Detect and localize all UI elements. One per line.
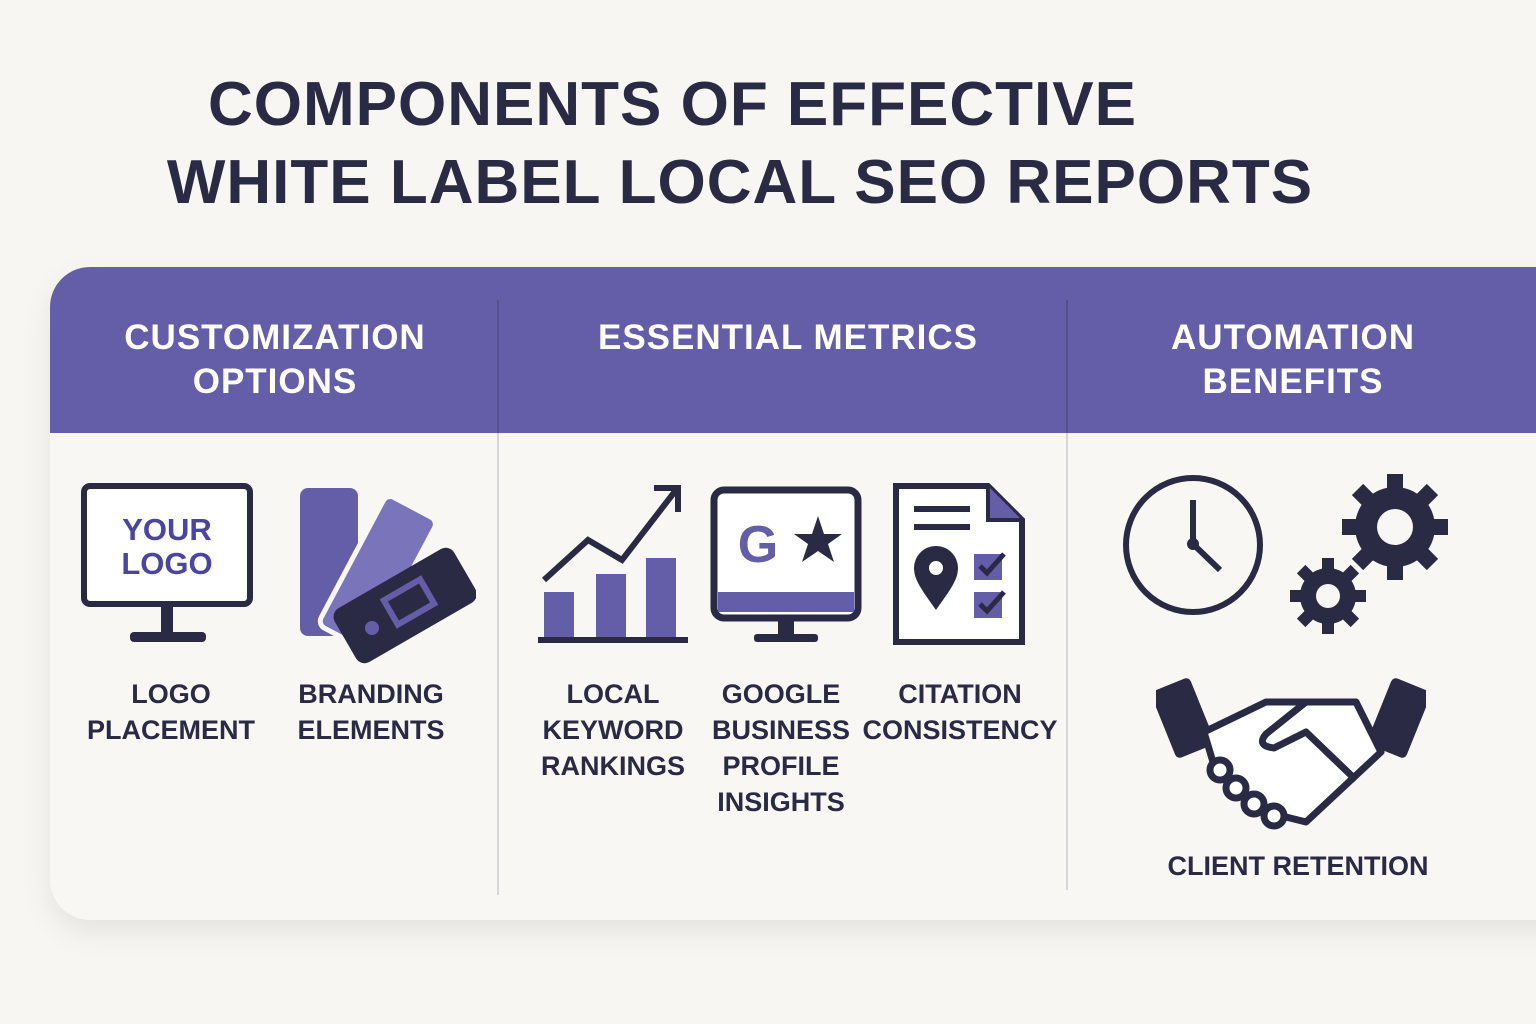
title [167, 70, 1313, 217]
label: client retention: CLIENT RETENTION [1168, 851, 1428, 881]
card [50, 267, 1536, 920]
title: COMPONENTS OF EFFECTIVE [208, 70, 1137, 139]
icon: logo monitor: LOGO [121, 546, 213, 581]
label: google business profile insights: PROFILE [722, 751, 840, 781]
heading: automation benefits [1171, 318, 1415, 401]
heading: essential metrics: ESSENTIAL METRICS [598, 318, 978, 357]
heading: customization options: OPTIONS [193, 362, 357, 401]
icon: logo monitor [81, 483, 253, 642]
label: citation consistency: CITATION [898, 679, 1022, 709]
heading: customization options [124, 318, 426, 401]
label: local keyword rankings: KEYWORD [542, 715, 684, 745]
label: google business profile insights: BUSINESS [712, 715, 850, 745]
label: local keyword rankings: LOCAL [566, 679, 659, 709]
heading: automation benefits: BENEFITS [1202, 362, 1384, 401]
icon: gears [1290, 474, 1448, 634]
icon: handshake [1156, 678, 1426, 830]
header band [50, 267, 1536, 433]
icon: swatches [300, 488, 476, 664]
heading: automation benefits: AUTOMATION [1171, 318, 1415, 357]
label: google business profile insights [712, 679, 850, 817]
label: local keyword rankings: RANKINGS [541, 751, 685, 781]
icon: google business monitor [710, 486, 862, 642]
title: WHITE LABEL LOCAL SEO REPORTS [167, 148, 1313, 217]
label: branding elements: BRANDING [298, 679, 444, 709]
label: logo placement: LOGO [131, 679, 211, 709]
icon: citation document [893, 483, 1025, 645]
label: branding elements [297, 679, 444, 745]
label: citation consistency: CONSISTENCY [862, 715, 1058, 745]
icon: google business monitor: G [738, 516, 778, 574]
label: logo placement [87, 679, 255, 745]
icon: clock [1123, 475, 1263, 615]
heading: customization options: CUSTOMIZATION [124, 318, 426, 357]
label: logo placement: PLACEMENT [87, 715, 255, 745]
icon: rankings chart [538, 485, 688, 643]
label: google business profile insights: GOOGLE [722, 679, 840, 709]
label: citation consistency [862, 679, 1058, 745]
icon: logo monitor: YOUR [122, 512, 212, 547]
label: local keyword rankings [541, 679, 685, 781]
label: branding elements: ELEMENTS [297, 715, 444, 745]
label: google business profile insights: INSIGHTS [717, 787, 845, 817]
